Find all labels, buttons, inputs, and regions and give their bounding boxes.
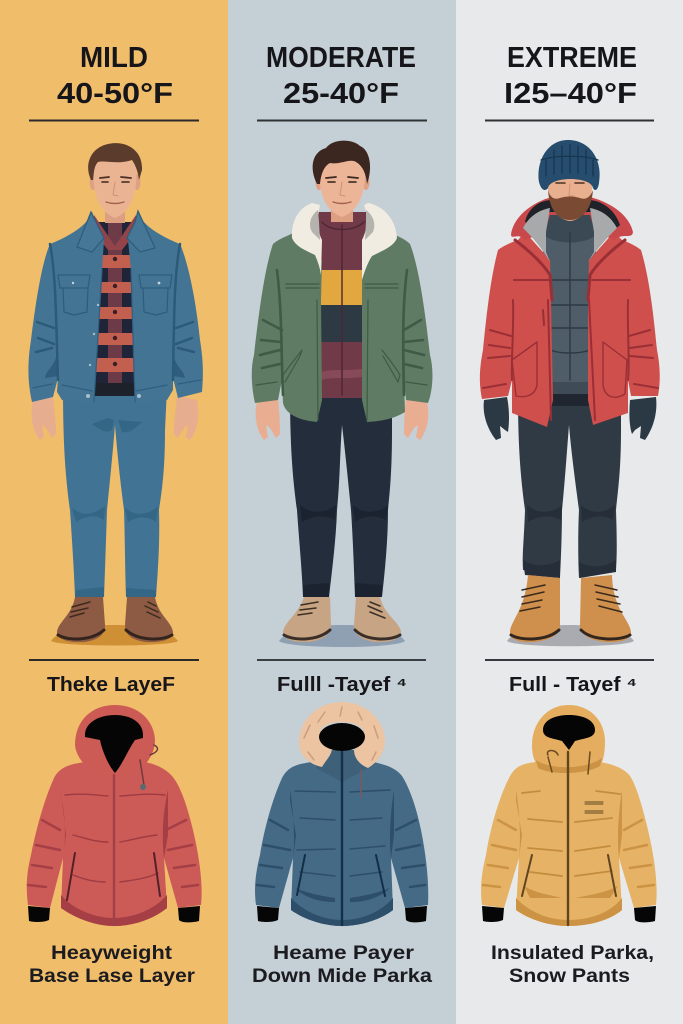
caption: extreme [491,943,654,987]
striped sweater [318,212,370,398]
caption: mild: Heayweight [51,943,173,964]
figure: mild outfit with denim jacket [28,143,203,646]
dark trousers [290,390,392,597]
hands [256,398,428,440]
right boot [354,597,401,642]
ground shadow [279,625,405,647]
caption: moderate [252,943,432,987]
hood [532,705,605,771]
dark snow trousers [518,395,621,578]
caption: extreme: Insulated Parka, [491,943,654,964]
chest pockets [58,275,172,315]
heading: mild: 40-50°F [57,78,173,110]
heading: moderate [266,42,416,110]
cuffs [257,906,427,922]
left boot [57,597,105,642]
jacket: amber hooded puffer [481,705,657,926]
collar [77,211,155,252]
hood [511,195,633,240]
panel: extreme background [456,0,683,1024]
caption: extreme: Snow Pants [509,966,630,987]
heading: mild: MILD [80,42,148,74]
ground shadow [507,625,634,646]
knit sweater [543,205,596,406]
cargo pockets [512,342,627,397]
jeans [63,388,167,597]
layer label: extreme: Full - Tayef ⁴ [509,674,637,696]
layer label: mild: Theke LayeF [47,674,175,696]
right boot [125,597,173,642]
head with beanie and beard [539,140,600,221]
shearling collar [292,203,397,280]
head [88,143,142,223]
heading: moderate: MODERATE [266,42,416,74]
heading: moderate: 25-40°F [283,78,399,110]
gloves [484,397,656,440]
caption: moderate: Down Mide Parka [252,966,432,987]
hood opening [85,715,143,773]
green jacket [252,203,432,422]
panel: mild background [0,0,228,1024]
caption: mild [29,943,196,987]
hands [32,396,198,440]
left boot [510,575,560,642]
caption: mild: Base Lase Layer [29,966,196,987]
heading: extreme: EXTREME [507,42,637,74]
jacket: red hooded puffer [27,705,202,926]
head [313,141,370,222]
cuffs [28,906,200,922]
figure: extreme outfit with red parka [480,140,660,646]
heading: extreme: I25–40°F [504,78,637,110]
jacket: navy puffer with fur hood [255,702,428,926]
plaid shirt [93,215,137,396]
layer label: moderate: Fulll -Tayef ⁴ [277,674,407,696]
hood [75,705,155,776]
caption: moderate: Heame Payer [273,943,415,964]
denim jacket [28,211,203,403]
left boot [283,597,331,642]
fur trim [299,702,385,768]
red parka [480,195,660,427]
right boot [580,575,631,642]
panel: moderate background [228,0,456,1024]
heading: mild [57,42,173,110]
figure: moderate outfit with green shearling jacket [252,141,432,647]
hood opening [319,723,365,751]
cuffs [482,906,656,922]
heading: extreme [504,42,637,110]
hood opening [543,715,595,750]
ground shadow [51,625,178,646]
